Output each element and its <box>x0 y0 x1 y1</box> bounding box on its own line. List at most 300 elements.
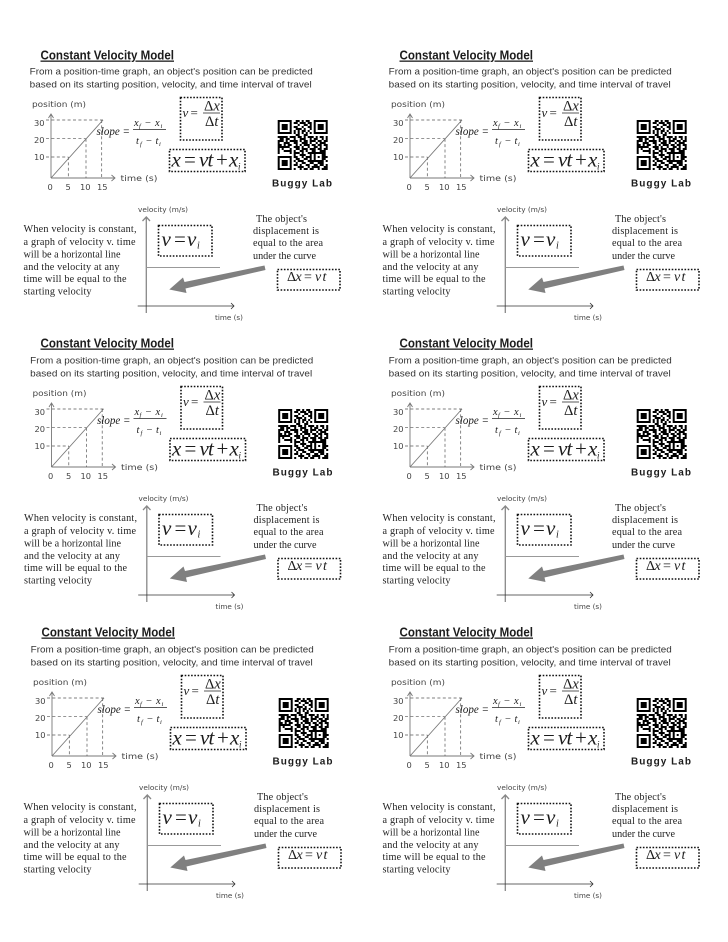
description text <box>30 66 313 90</box>
position equation box: i <box>238 450 242 460</box>
position equation box: t <box>566 726 574 750</box>
velocity formula box: = <box>190 105 198 120</box>
position-time graph: position (m) <box>391 677 445 687</box>
velocity equation box: v <box>162 805 172 829</box>
slope formula: i <box>160 123 162 130</box>
velocity-time explanation text: and the velocity at any <box>24 551 121 562</box>
description text: based on its starting position, velocity, and time interval of travel <box>30 80 312 90</box>
slope formula: − <box>505 714 511 725</box>
description text: based on its starting position, velocity, and time interval of travel <box>389 368 671 380</box>
card 6: bottom right <box>382 624 699 900</box>
velocity formula box: v <box>184 683 190 698</box>
displacement equation box: v <box>316 848 323 863</box>
slope formula: f <box>499 141 502 148</box>
position-time graph: 15 <box>456 760 467 770</box>
position equation box: x <box>530 726 540 750</box>
position-time graph: 10 <box>80 182 91 192</box>
position equation box: v <box>558 726 568 750</box>
slope formula <box>456 696 525 726</box>
description text: From a position-time graph, an object's position can be predicted <box>31 644 314 656</box>
velocity formula box: = <box>192 683 199 698</box>
position equation box <box>528 148 604 172</box>
position-time graph: 10 <box>34 441 45 451</box>
velocity equation box: v <box>520 227 530 251</box>
velocity formula box: Δx <box>204 388 221 404</box>
position-time graph: 5 <box>66 182 71 192</box>
position equation box: = <box>543 148 555 172</box>
position-time graph: 30 <box>393 407 404 417</box>
velocity-time graph <box>497 205 602 322</box>
velocity formula box: Δx <box>563 676 579 692</box>
slope formula: slope = <box>456 126 489 138</box>
velocity formula box <box>540 676 581 718</box>
slope formula: x <box>154 407 160 418</box>
velocity-time graph: time (s) <box>216 602 244 611</box>
slope formula <box>98 696 167 726</box>
position-time graph: time (s) <box>480 173 516 183</box>
position equation box <box>170 148 245 172</box>
velocity formula box: = <box>550 683 557 698</box>
slope formula: t <box>156 425 160 436</box>
position-time graph: 20 <box>34 135 45 145</box>
displacement explanation text <box>254 503 324 551</box>
position equation box: x <box>228 148 239 172</box>
position equation box: x <box>170 148 182 172</box>
title: Constant Velocity Model <box>400 48 533 62</box>
velocity-time explanation text: time will be equal to the <box>382 852 486 863</box>
position equation box <box>528 436 604 460</box>
slope formula: f <box>140 430 144 437</box>
velocity-time explanation text <box>24 224 136 298</box>
velocity-time explanation text: starting velocity <box>24 576 93 586</box>
position equation box: i <box>239 740 242 750</box>
arrow: points to area under the curve <box>170 554 266 582</box>
velocity-time explanation text: will be a horizontal line <box>24 828 121 838</box>
icon: QR code <box>278 121 328 169</box>
description text <box>389 644 672 668</box>
description text <box>31 644 314 668</box>
position equation box: + <box>575 148 587 172</box>
icon: QR code <box>278 410 328 458</box>
velocity-time explanation text: time will be equal to the <box>382 274 486 285</box>
slope formula <box>456 407 525 437</box>
description text: From a position-time graph, an object's position can be predicted <box>389 644 672 656</box>
position-time graph: 20 <box>34 424 45 434</box>
displacement explanation text <box>612 792 682 840</box>
position-time graph: 10 <box>81 760 92 770</box>
velocity-time explanation text: When velocity is constant, <box>382 513 496 524</box>
slope formula: x <box>134 407 140 418</box>
velocity equation box: i <box>556 818 559 830</box>
velocity formula box: = <box>550 105 557 120</box>
velocity-time explanation text: and the velocity at any <box>24 840 120 851</box>
position equation box: t <box>208 436 215 460</box>
slope formula: x <box>155 696 161 707</box>
velocity equation box <box>159 514 212 545</box>
slope formula: t <box>136 425 140 436</box>
description text <box>30 356 313 380</box>
velocity-time explanation text: a graph of velocity v. time <box>24 526 136 537</box>
slope formula: − <box>146 696 152 707</box>
slope formula: i <box>520 701 522 708</box>
velocity equation box: = <box>175 805 187 829</box>
displacement equation box <box>636 558 699 579</box>
velocity-time explanation text <box>382 224 496 298</box>
velocity equation box: v <box>520 805 530 829</box>
position equation box: = <box>185 726 197 750</box>
description text: From a position-time graph, an object's position can be predicted <box>30 66 313 78</box>
displacement explanation text: equal to the area <box>253 238 323 249</box>
slope formula: i <box>160 719 162 726</box>
slope formula: x <box>133 118 139 129</box>
slope formula: − <box>146 425 152 436</box>
velocity formula box: v <box>183 394 189 409</box>
icon: QR code <box>637 121 687 169</box>
velocity formula box: = <box>550 394 557 409</box>
description text: based on its starting position, velocity, and time interval of travel <box>389 80 671 90</box>
position-time graph: 10 <box>35 730 46 740</box>
position-time graph <box>32 99 158 192</box>
displacement equation box: Δ <box>288 559 297 574</box>
displacement equation box: Δ <box>287 270 296 285</box>
position-time graph <box>32 388 158 481</box>
QR label: Buggy Lab <box>631 756 691 768</box>
description text: based on its starting position, velocity, and time interval of travel <box>31 658 313 668</box>
slope formula: − <box>504 118 510 129</box>
position-time graph: 20 <box>393 135 404 145</box>
position equation box: = <box>184 148 196 172</box>
position equation box: = <box>543 436 555 460</box>
slope formula: t <box>514 714 518 725</box>
velocity-time explanation text: When velocity is constant, <box>24 224 136 235</box>
position equation box: + <box>216 148 228 172</box>
position equation box: x <box>587 436 598 460</box>
position-time graph <box>391 99 516 192</box>
velocity-time explanation text: and the velocity at any <box>382 840 479 851</box>
velocity formula box: v <box>542 394 548 409</box>
slope formula: x <box>492 696 498 707</box>
velocity-time explanation text <box>382 513 496 586</box>
position-time graph: time (s) <box>480 462 516 472</box>
displacement explanation text: equal to the area <box>612 816 682 827</box>
slope formula: f <box>140 701 143 708</box>
position equation box: = <box>184 436 196 460</box>
title: Constant Velocity Model <box>40 48 174 62</box>
velocity-time graph: velocity (m/s) <box>138 205 188 214</box>
displacement explanation text: displacement is <box>612 515 678 526</box>
displacement explanation text: under the curve <box>612 540 675 551</box>
position-time graph: 15 <box>98 760 109 770</box>
displacement explanation text: under the curve <box>612 251 675 262</box>
card 1: top left <box>24 48 340 322</box>
position-time graph: 15 <box>456 182 467 192</box>
displacement explanation text <box>612 214 682 262</box>
velocity formula box <box>540 386 581 429</box>
displacement equation box: x <box>654 559 662 574</box>
slope formula: x <box>492 407 498 418</box>
position-time graph: 10 <box>393 730 404 740</box>
slope formula: t <box>156 714 160 725</box>
velocity-time explanation text <box>24 513 137 586</box>
arrow: points to area under the curve <box>169 266 266 293</box>
position equation box: t <box>566 436 574 460</box>
QR label: Buggy Lab <box>631 468 691 478</box>
position equation box: i <box>238 162 241 172</box>
velocity-time explanation text: will be a horizontal line <box>382 828 480 838</box>
slope formula: − <box>505 425 511 436</box>
velocity-time graph: time (s) <box>574 313 602 322</box>
title: Constant Velocity Model <box>400 336 533 350</box>
velocity equation box: v <box>188 805 198 829</box>
position-time graph: position (m) <box>391 388 445 398</box>
position equation box: x <box>587 726 598 750</box>
slope formula: slope = <box>456 415 489 427</box>
arrow: points to area under the curve <box>528 266 624 293</box>
slope formula: f <box>140 141 143 148</box>
position-time graph: 30 <box>393 118 404 128</box>
slope formula: t <box>495 714 499 725</box>
QR label: Buggy Lab <box>272 756 332 768</box>
displacement explanation text: displacement is <box>612 226 678 237</box>
slope formula: f <box>139 123 142 130</box>
velocity-time explanation text: starting velocity <box>382 576 451 586</box>
velocity-time explanation text: starting velocity <box>24 864 92 876</box>
displacement equation box <box>278 270 340 290</box>
velocity equation box <box>158 226 212 256</box>
slope formula: f <box>499 719 502 726</box>
slope formula: − <box>147 714 153 725</box>
velocity formula box: Δx <box>563 98 579 114</box>
position equation box: t <box>208 148 214 172</box>
position-time graph: 15 <box>98 471 108 481</box>
slope formula: x <box>154 118 160 129</box>
position-time graph: 15 <box>97 182 108 192</box>
position-time graph: 0 <box>406 760 412 770</box>
velocity-time explanation text: time will be equal to the <box>382 563 486 574</box>
displacement equation box: = <box>663 848 671 863</box>
card 5: bottom left <box>24 624 341 900</box>
velocity equation box: = <box>533 805 545 829</box>
displacement equation box: v <box>674 559 681 574</box>
slope formula: f <box>140 412 142 419</box>
slope formula: slope = <box>97 415 130 427</box>
velocity-time explanation text: will be a horizontal line <box>24 250 121 260</box>
velocity-time graph: time (s) <box>215 313 243 322</box>
velocity equation box <box>518 514 571 545</box>
position equation box: + <box>575 726 587 750</box>
displacement equation box: t <box>324 848 328 863</box>
velocity formula box: Δx <box>563 388 579 404</box>
displacement equation box: t <box>322 270 328 285</box>
title: Constant Velocity Model <box>40 336 174 350</box>
position equation box: v <box>200 436 210 460</box>
position equation box: t <box>208 726 216 750</box>
slope formula: x <box>513 118 519 129</box>
position equation box: i <box>597 162 600 172</box>
velocity-time explanation text: a graph of velocity v. time <box>382 815 495 826</box>
slope formula: slope = <box>98 704 131 716</box>
slope formula: i <box>160 430 162 437</box>
velocity formula box <box>180 98 222 140</box>
slope formula: x <box>492 118 498 129</box>
position equation box: x <box>229 726 240 750</box>
velocity-time explanation text: starting velocity <box>24 286 92 298</box>
velocity-time explanation text: time will be equal to the <box>24 274 127 285</box>
velocity-time explanation text: a graph of velocity v. time <box>382 526 495 537</box>
displacement equation box: x <box>654 270 662 285</box>
velocity-time explanation text: will be a horizontal line <box>382 538 480 550</box>
position-time graph: 5 <box>424 471 430 481</box>
velocity-time graph <box>497 494 602 611</box>
position equation box: = <box>543 726 555 750</box>
slope formula: t <box>136 136 140 147</box>
displacement equation box: Δ <box>646 270 655 285</box>
velocity-time graph: velocity (m/s) <box>497 783 547 792</box>
velocity-time explanation text: a graph of velocity v. time <box>382 237 495 248</box>
description text: based on its starting position, velocity, and time interval of travel <box>389 658 671 668</box>
slope formula: f <box>498 123 501 130</box>
velocity equation box: = <box>533 516 545 540</box>
displacement explanation text: The object's <box>256 214 307 225</box>
displacement equation box: = <box>663 559 671 574</box>
velocity formula box: Δt <box>564 114 578 130</box>
velocity-time explanation text: When velocity is constant, <box>382 224 496 235</box>
arrow: points to area under the curve <box>528 554 624 582</box>
velocity-time explanation text: starting velocity <box>382 286 451 298</box>
position-time graph: 30 <box>35 696 46 706</box>
velocity formula box: v <box>182 105 188 120</box>
position equation box: x <box>171 436 182 460</box>
position equation box: x <box>228 436 240 460</box>
arrow: points to area under the curve <box>170 844 266 871</box>
slope formula: i <box>159 141 161 148</box>
velocity-time graph <box>138 205 243 322</box>
slope formula: i <box>518 719 520 726</box>
position-time graph: 5 <box>66 760 72 770</box>
displacement explanation text: displacement is <box>612 804 678 815</box>
description text <box>389 356 672 380</box>
velocity equation box <box>518 226 571 256</box>
displacement explanation text: under the curve <box>254 540 317 551</box>
displacement explanation text: The object's <box>615 792 666 803</box>
position equation box: x <box>587 148 598 172</box>
velocity equation box: = <box>174 227 186 251</box>
position-time graph: 0 <box>406 182 412 192</box>
position equation box <box>528 726 604 750</box>
position equation box: + <box>217 726 229 750</box>
position equation box: i <box>597 450 600 460</box>
displacement explanation text: equal to the area <box>254 816 324 827</box>
velocity-time explanation text: When velocity is constant, <box>24 513 137 524</box>
slope formula: − <box>504 696 510 707</box>
velocity formula box: Δt <box>564 403 578 419</box>
velocity formula box: Δt <box>206 403 220 419</box>
displacement equation box: v <box>315 270 322 285</box>
velocity equation box <box>160 804 213 834</box>
velocity equation box: v <box>546 227 556 251</box>
title: Constant Velocity Model <box>42 624 175 640</box>
position-time graph: 20 <box>35 713 46 723</box>
description text <box>389 66 672 90</box>
position-time graph: 0 <box>406 471 412 481</box>
velocity formula box: v <box>542 683 548 698</box>
displacement explanation text: displacement is <box>254 804 320 815</box>
displacement equation box: = <box>305 848 313 863</box>
velocity-time explanation text: a graph of velocity v. time <box>24 815 136 826</box>
velocity equation box: i <box>556 240 559 252</box>
velocity-time explanation text: and the velocity at any <box>382 262 479 273</box>
position equation box: i <box>597 740 600 750</box>
slope formula: x <box>134 696 140 707</box>
displacement explanation text: under the curve <box>254 829 317 840</box>
position equation box: x <box>172 726 182 750</box>
velocity-time explanation text: starting velocity <box>382 864 451 876</box>
velocity equation box: v <box>162 227 172 251</box>
icon: QR code <box>637 699 687 747</box>
velocity formula box: Δx <box>204 98 220 114</box>
position-time graph: time (s) <box>122 751 158 761</box>
velocity-time explanation text: and the velocity at any <box>24 262 120 273</box>
velocity-time graph <box>497 783 602 900</box>
velocity equation box: i <box>198 818 201 830</box>
displacement explanation text: The object's <box>256 503 308 514</box>
slope formula <box>96 118 166 148</box>
velocity equation box: i <box>198 530 200 540</box>
displacement equation box: Δ <box>288 848 297 863</box>
position-time graph: time (s) <box>121 462 158 472</box>
velocity equation box: v <box>162 516 172 540</box>
displacement equation box: x <box>296 848 304 863</box>
position-time graph: 5 <box>424 760 430 770</box>
displacement equation box: v <box>674 270 681 285</box>
displacement explanation text <box>253 214 323 262</box>
displacement equation box: = <box>663 270 671 285</box>
position-time graph: 10 <box>80 471 91 481</box>
position-time graph: 0 <box>48 471 53 481</box>
position equation box: v <box>199 148 209 172</box>
arrow: points to area under the curve <box>528 844 624 871</box>
slope formula: i <box>518 430 520 437</box>
velocity-time graph: velocity (m/s) <box>497 494 547 503</box>
icon: QR code <box>279 699 329 747</box>
displacement equation box: t <box>323 559 328 574</box>
slope formula: t <box>156 136 160 147</box>
velocity formula box <box>540 98 581 140</box>
slope formula: x <box>513 407 519 418</box>
position-time graph: position (m) <box>32 388 86 398</box>
velocity equation box: = <box>174 516 186 540</box>
displacement equation box: = <box>304 270 312 285</box>
slope formula: t <box>514 136 518 147</box>
position equation box: v <box>200 726 210 750</box>
description text: From a position-time graph, an object's position can be predicted <box>30 356 313 366</box>
position equation box <box>170 436 246 460</box>
displacement equation box: = <box>304 559 312 574</box>
displacement equation box: v <box>674 848 681 863</box>
displacement explanation text: equal to the area <box>612 238 682 249</box>
velocity equation box: v <box>520 516 530 540</box>
velocity equation box: i <box>197 240 200 252</box>
slope formula: f <box>498 701 501 708</box>
velocity-time graph <box>138 494 244 611</box>
slope formula: − <box>146 407 152 418</box>
velocity-time graph <box>139 783 244 900</box>
description text: based on its starting position, velocity, and time interval of travel <box>30 368 312 380</box>
slope formula: slope = <box>456 704 489 716</box>
slope formula: t <box>514 425 518 436</box>
slope formula: − <box>505 136 511 147</box>
velocity-time graph: velocity (m/s) <box>139 783 189 792</box>
